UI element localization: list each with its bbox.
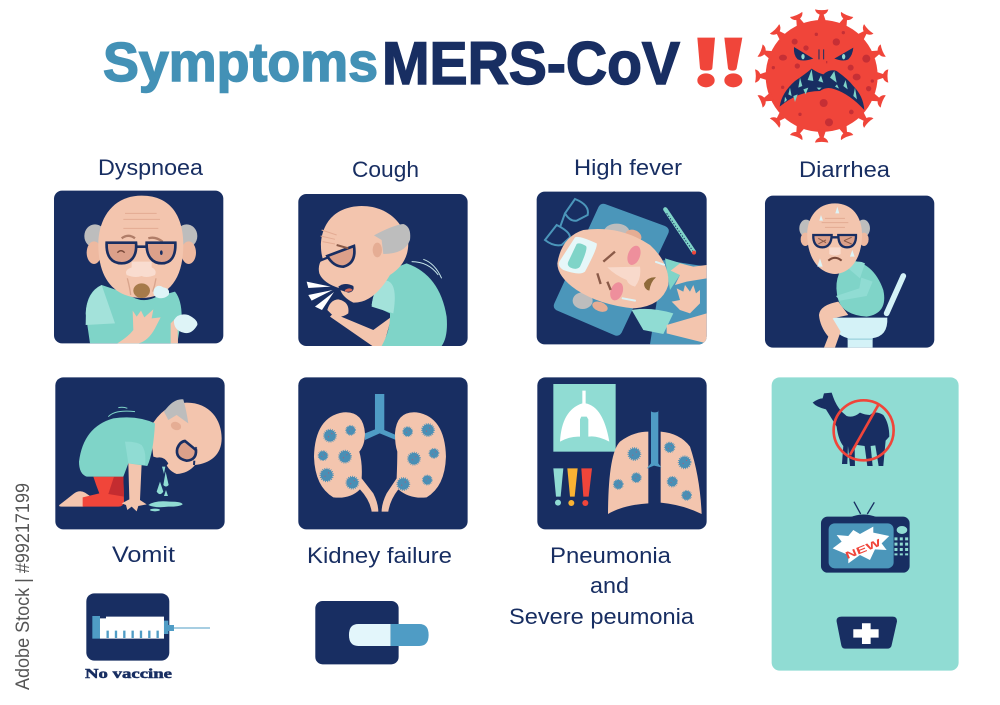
leg xyxy=(819,302,848,348)
heading: Kidney failure: Kidney failure xyxy=(307,543,452,568)
glasses xyxy=(177,441,196,461)
hair xyxy=(604,224,629,234)
panel: prevention xyxy=(772,377,959,671)
blanket and shirt xyxy=(650,260,707,344)
glasses xyxy=(327,246,354,267)
icon: exclamation marks xyxy=(697,38,742,87)
icon: red exclamation marks and angry virus xyxy=(697,9,888,143)
breath clouds xyxy=(153,286,169,298)
heading: Cough: Cough xyxy=(352,157,419,182)
pillow xyxy=(554,204,669,336)
body xyxy=(836,260,884,317)
heading: Dyspnoea: Dyspnoea xyxy=(98,155,204,180)
arm and hand xyxy=(122,463,147,511)
sweat xyxy=(817,207,855,267)
legs and foot xyxy=(59,491,90,507)
panel: cough xyxy=(298,194,468,347)
head xyxy=(150,403,222,474)
shirt xyxy=(86,285,182,343)
credit: Adobe Stock id: Adobe Stock | #99217199 xyxy=(13,483,34,690)
title: MERS-CoV: MERS-CoV xyxy=(382,30,680,97)
hair xyxy=(84,224,101,246)
virus particles xyxy=(318,424,438,490)
glasses xyxy=(107,243,175,263)
trachea xyxy=(647,411,661,469)
text block: pneumonia: and xyxy=(590,573,629,598)
eyes xyxy=(597,252,615,290)
text block: pneumonia: Severe peumonia xyxy=(509,604,695,629)
shirt xyxy=(79,417,155,477)
thermometer xyxy=(665,209,694,252)
arm xyxy=(836,278,873,301)
eyes xyxy=(794,47,853,63)
hands xyxy=(671,263,707,285)
lungs xyxy=(608,432,648,514)
cold pack xyxy=(559,237,597,273)
drips and puddle xyxy=(157,467,169,496)
mouth xyxy=(338,284,354,293)
x-ray xyxy=(553,384,616,452)
hair and ear xyxy=(164,399,188,423)
virus particles xyxy=(614,443,691,500)
shirt xyxy=(372,263,447,346)
icon: angry virus xyxy=(755,9,888,143)
title: Symptoms: Symptoms xyxy=(103,31,378,93)
head xyxy=(557,229,668,308)
icon: no vaccine syringe xyxy=(86,593,210,661)
head xyxy=(319,206,408,303)
hair and ear xyxy=(374,224,410,254)
glasses on bed xyxy=(545,199,588,245)
toilet xyxy=(848,338,873,348)
left kidney xyxy=(314,412,378,512)
hair and ears xyxy=(799,220,810,236)
panel: high fever xyxy=(537,192,707,344)
motion lines xyxy=(412,259,442,278)
heading: Vomit: Vomit xyxy=(112,542,175,567)
mouth xyxy=(780,69,864,110)
text block: pneumonia: Pneumonia xyxy=(550,543,672,568)
glasses xyxy=(813,235,856,247)
exclamation marks xyxy=(553,468,592,506)
hand xyxy=(117,309,161,343)
panel: vomit xyxy=(55,377,225,529)
right kidney xyxy=(382,412,446,512)
text block: pneumonia xyxy=(509,543,695,629)
icon: medical kit xyxy=(837,617,897,649)
panel: dyspnoea xyxy=(54,191,223,343)
toilet tank xyxy=(887,276,903,313)
nose and mouth xyxy=(126,262,156,277)
icon: television news xyxy=(821,502,910,573)
cheeks xyxy=(627,246,641,265)
motion lines xyxy=(108,407,135,417)
trachea xyxy=(365,394,396,440)
head xyxy=(807,203,862,274)
arm xyxy=(330,313,392,347)
nose xyxy=(607,267,640,287)
panel: pneumonia xyxy=(537,377,707,529)
head xyxy=(98,196,183,298)
panel: diarrhea xyxy=(765,196,934,348)
heading: Diarrhea: Diarrhea xyxy=(799,157,891,182)
icon: camel prohibited xyxy=(813,393,894,466)
icon: pill box xyxy=(315,601,429,664)
cough burst xyxy=(307,282,334,310)
label: No vaccine: No vaccine xyxy=(85,667,172,682)
panel: kidney failure xyxy=(298,377,468,529)
fist xyxy=(327,299,349,317)
nose and frown xyxy=(829,247,841,256)
icon: television news: NEW xyxy=(844,537,884,562)
heading: High fever: High fever xyxy=(574,155,682,180)
mouth xyxy=(644,277,656,291)
mouth xyxy=(155,457,168,467)
